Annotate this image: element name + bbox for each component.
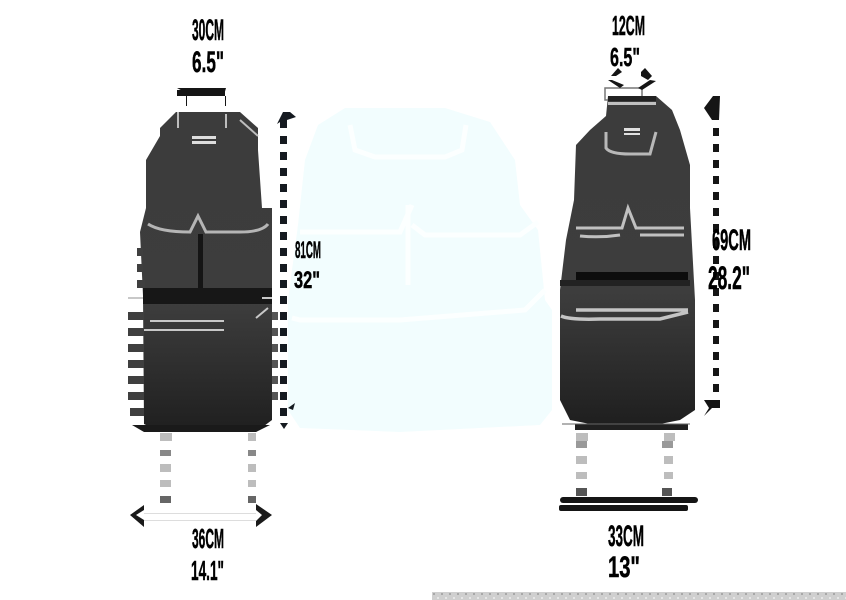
text: 12CM: [612, 10, 645, 41]
left backpack pocket zips: [148, 216, 268, 232]
right backpack: side view: [560, 88, 695, 496]
left bottom dimension arrow: [130, 504, 272, 527]
right backpack top pocket trim: [606, 132, 656, 154]
ghost backpack: pale cyan centre silhouette: [288, 108, 552, 432]
left backpack body: [140, 112, 272, 432]
right bottom dimension: double bar arrow: [559, 497, 698, 511]
text: 69CM: [712, 224, 751, 257]
left top dimension: width arrow: [177, 88, 226, 106]
text: 14.1": [191, 555, 224, 586]
left backpack brand label: [192, 136, 216, 144]
right backpack lower stripes: [561, 310, 688, 319]
right top width label: 6.5": [610, 42, 640, 72]
right backpack legs: [576, 433, 675, 496]
left height dimension: dashed arrow: [277, 112, 296, 429]
text: 36CM: [192, 523, 224, 554]
right backpack brand label: [624, 128, 640, 135]
right backpack base: [575, 424, 688, 430]
left backpack handle loop: [178, 112, 258, 136]
right height label: 28.2": [708, 260, 750, 296]
left backpack: front view: [128, 112, 278, 503]
right top dimension arrow: [608, 68, 656, 90]
right height label: [708, 224, 751, 296]
left top width label: 6.5": [192, 46, 224, 79]
right bottom width label: [608, 520, 644, 584]
text: 30CM: [192, 14, 224, 47]
right bottom width label: 13": [608, 551, 640, 584]
right backpack body: [560, 96, 695, 424]
left top width label: [192, 14, 224, 79]
left bottom width label: [191, 523, 224, 586]
left backpack side fabric bands: [128, 248, 278, 416]
left backpack legs: [160, 433, 256, 503]
left backpack dark band: [143, 288, 272, 304]
right top width label: [610, 10, 645, 72]
right height dimension: dashed arrow: [704, 96, 720, 416]
dithered strip: bottom right: [432, 592, 846, 600]
right backpack upper zips: [576, 208, 684, 237]
text: 81CM: [295, 237, 321, 264]
text: 33CM: [608, 520, 644, 553]
left height label: [294, 237, 321, 294]
left backpack lower pocket stripes: [128, 298, 272, 330]
left backpack centre seam: [198, 234, 203, 290]
right backpack dark band: [576, 272, 688, 280]
left height label: 32": [294, 267, 320, 294]
right backpack handle: [605, 88, 642, 100]
left backpack base: [132, 425, 270, 432]
